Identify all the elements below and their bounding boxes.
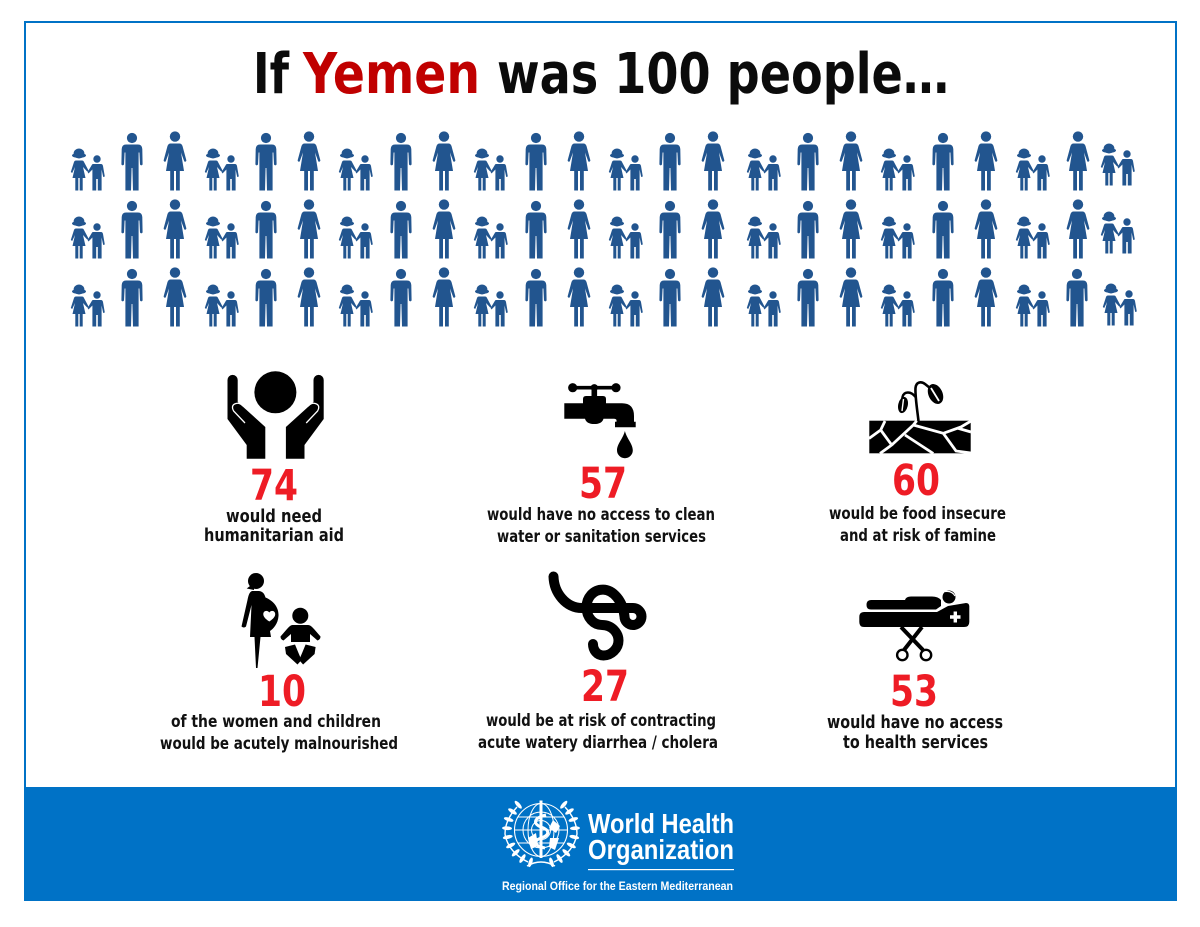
- WHO emblem: [502, 800, 580, 868]
- WHO wordmark: [502, 808, 734, 893]
- footer band: [24, 787, 1177, 901]
- stat: 60 food insecure: and at risk of famine: [840, 526, 996, 545]
- WHO wordmark: Organization: [588, 834, 734, 865]
- stat: 10 malnourished: 10: [258, 667, 306, 717]
- stat: 74 humanitarian aid: [204, 461, 344, 546]
- people row 2: [71, 199, 1135, 258]
- stat: 60 food insecure: would be food insecure: [829, 504, 1006, 523]
- WHO wordmark: World Health: [588, 808, 734, 839]
- stat: 60 food insecure: 60: [892, 456, 940, 506]
- stat: 27 cholera: 27: [581, 662, 629, 712]
- icon: stretcher: [859, 590, 969, 660]
- WHO wordmark: Regional Office for the Eastern Mediterranean: [502, 881, 733, 893]
- icon: seedling in cracked earth: [869, 382, 971, 454]
- stat: 10 malnourished: [160, 667, 398, 753]
- stat: 27 cholera: would be at risk of contracting: [486, 711, 716, 730]
- stat: 53 health services: [827, 667, 1003, 753]
- stat: 53 health services: would have no access: [827, 713, 1003, 733]
- stat: 53 health services: to health services: [843, 733, 988, 753]
- stat: 57 clean water: [487, 459, 715, 546]
- icon: cholera bacterium: [554, 576, 642, 656]
- title: Yemen: [302, 42, 480, 107]
- stat: 53 health services: 53: [890, 667, 938, 717]
- people row 1: [71, 131, 1135, 190]
- icon: water tap: [564, 383, 636, 458]
- title: If: [253, 42, 290, 107]
- stat: 10 malnourished: would be acutely malnourished: [160, 734, 398, 753]
- stat: 57 clean water: water or sanitation services: [497, 527, 706, 546]
- stat: 60 food insecure: [829, 456, 1006, 545]
- stat: 10 malnourished: of the women and children: [171, 712, 381, 731]
- title: [253, 42, 949, 107]
- stat: 57 clean water: 57: [579, 459, 627, 509]
- title: was 100 people…: [497, 42, 949, 107]
- stat: 27 cholera: [478, 662, 718, 752]
- icon: pregnant woman and baby: [242, 573, 320, 668]
- stat: 74 humanitarian aid: humanitarian aid: [204, 526, 344, 546]
- stat: 74 humanitarian aid: 74: [250, 461, 298, 511]
- stat: 74 humanitarian aid: would need: [226, 507, 322, 527]
- stat: 57 clean water: would have no access to clean: [487, 505, 715, 524]
- icon: hands holding circle: [228, 371, 324, 459]
- people row 3: [71, 267, 1137, 326]
- stat: 27 cholera: acute watery diarrhea / cholera: [478, 733, 718, 752]
